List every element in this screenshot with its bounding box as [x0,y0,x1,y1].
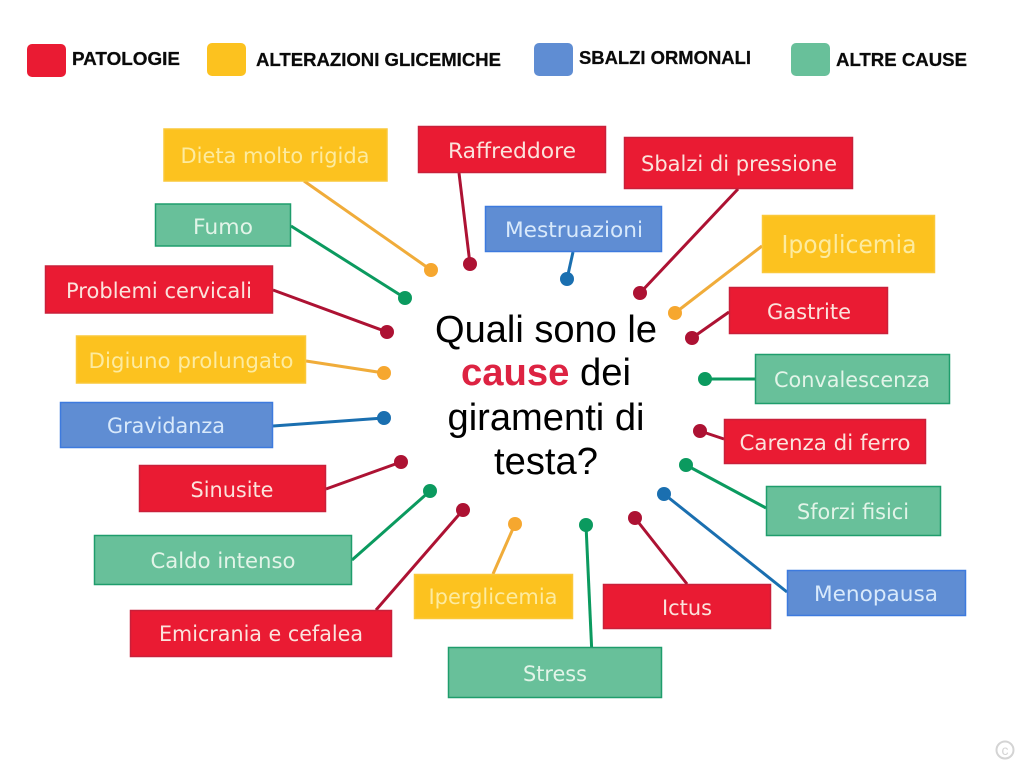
cause: Convalescenza: Convalescenza [774,368,930,393]
cause: Sinusite: Sinusite [190,478,274,503]
cause: Sbalzi di pressione: Sbalzi di pressione [641,152,837,177]
cause: Convalescenza [698,354,950,404]
cause: Gastrite: Gastrite [767,300,851,325]
central question [435,309,657,483]
cause: Iperglicemia: Iperglicemia [428,585,558,610]
cause: Emicrania e cefalea: Emicrania e cefalea [159,622,363,647]
legend: sbalzi ormonali [534,43,751,76]
cause: Digiuno prolungato: Digiuno prolungato [88,349,294,374]
cause: Iperglicemia [414,517,572,618]
cause: Gastrite [685,288,888,345]
cause: Ipoglicemia [668,216,934,320]
legend: altre cause: ALTRE CAUSE [836,50,967,70]
cause: Raffreddore [418,126,606,271]
cause: Ictus [604,511,770,628]
central question: giramenti di [448,397,644,439]
legend: alterazioni glicemiche: ALTERAZIONI GLICEMICHE [256,50,501,70]
legend [27,43,967,77]
cause: Gravidanza [60,402,391,448]
cause: Caldo intenso: Caldo intenso [150,549,296,574]
cause: Carenza di ferro [693,420,926,464]
legend: alterazioni glicemiche [207,43,501,76]
central question: cause dei [461,352,631,394]
cause: Menopausa [657,487,966,616]
cause: Ictus: Ictus [662,596,712,621]
cause: Dieta molto rigida: Dieta molto rigida [180,144,370,169]
cause: Dieta molto rigida [164,129,438,277]
cause: Gravidanza: Gravidanza [107,414,225,439]
cause: Sinusite [140,455,408,512]
cause: Fumo [156,204,412,305]
cause: Menopausa: Menopausa [814,582,938,607]
cause: Sforzi fisici: Sforzi fisici [797,500,909,525]
cause: Stress: Stress [523,662,587,687]
cause: Stress [448,518,662,698]
legend: sbalzi ormonali: SBALZI ORMONALI [579,48,751,68]
cause: Raffreddore: Raffreddore [448,139,576,164]
central question: Quali sono le [435,309,657,351]
cause: Fumo: Fumo [193,215,253,240]
cause: Sforzi fisici [679,458,940,536]
cause: Caldo intenso [94,484,437,584]
cause: Ipoglicemia: Ipoglicemia [782,230,916,259]
cause: Problemi cervicali: Problemi cervicali [66,279,252,304]
legend: altre cause [791,43,967,76]
cause: Emicrania e cefalea [130,503,470,656]
cause: Digiuno prolungato [76,336,391,383]
cause: Problemi cervicali [46,266,394,339]
copyright mark [996,742,1014,758]
copyright mark: c [1002,742,1008,758]
legend: patologie [27,44,180,77]
cause: Mestruazioni [486,206,662,286]
legend: patologie: PATOLOGIE [72,49,180,69]
central question: testa? [494,441,598,483]
cause: Mestruazioni: Mestruazioni [505,218,643,243]
cause: Sbalzi di pressione [624,138,852,300]
cause: Carenza di ferro: Carenza di ferro [740,431,910,456]
